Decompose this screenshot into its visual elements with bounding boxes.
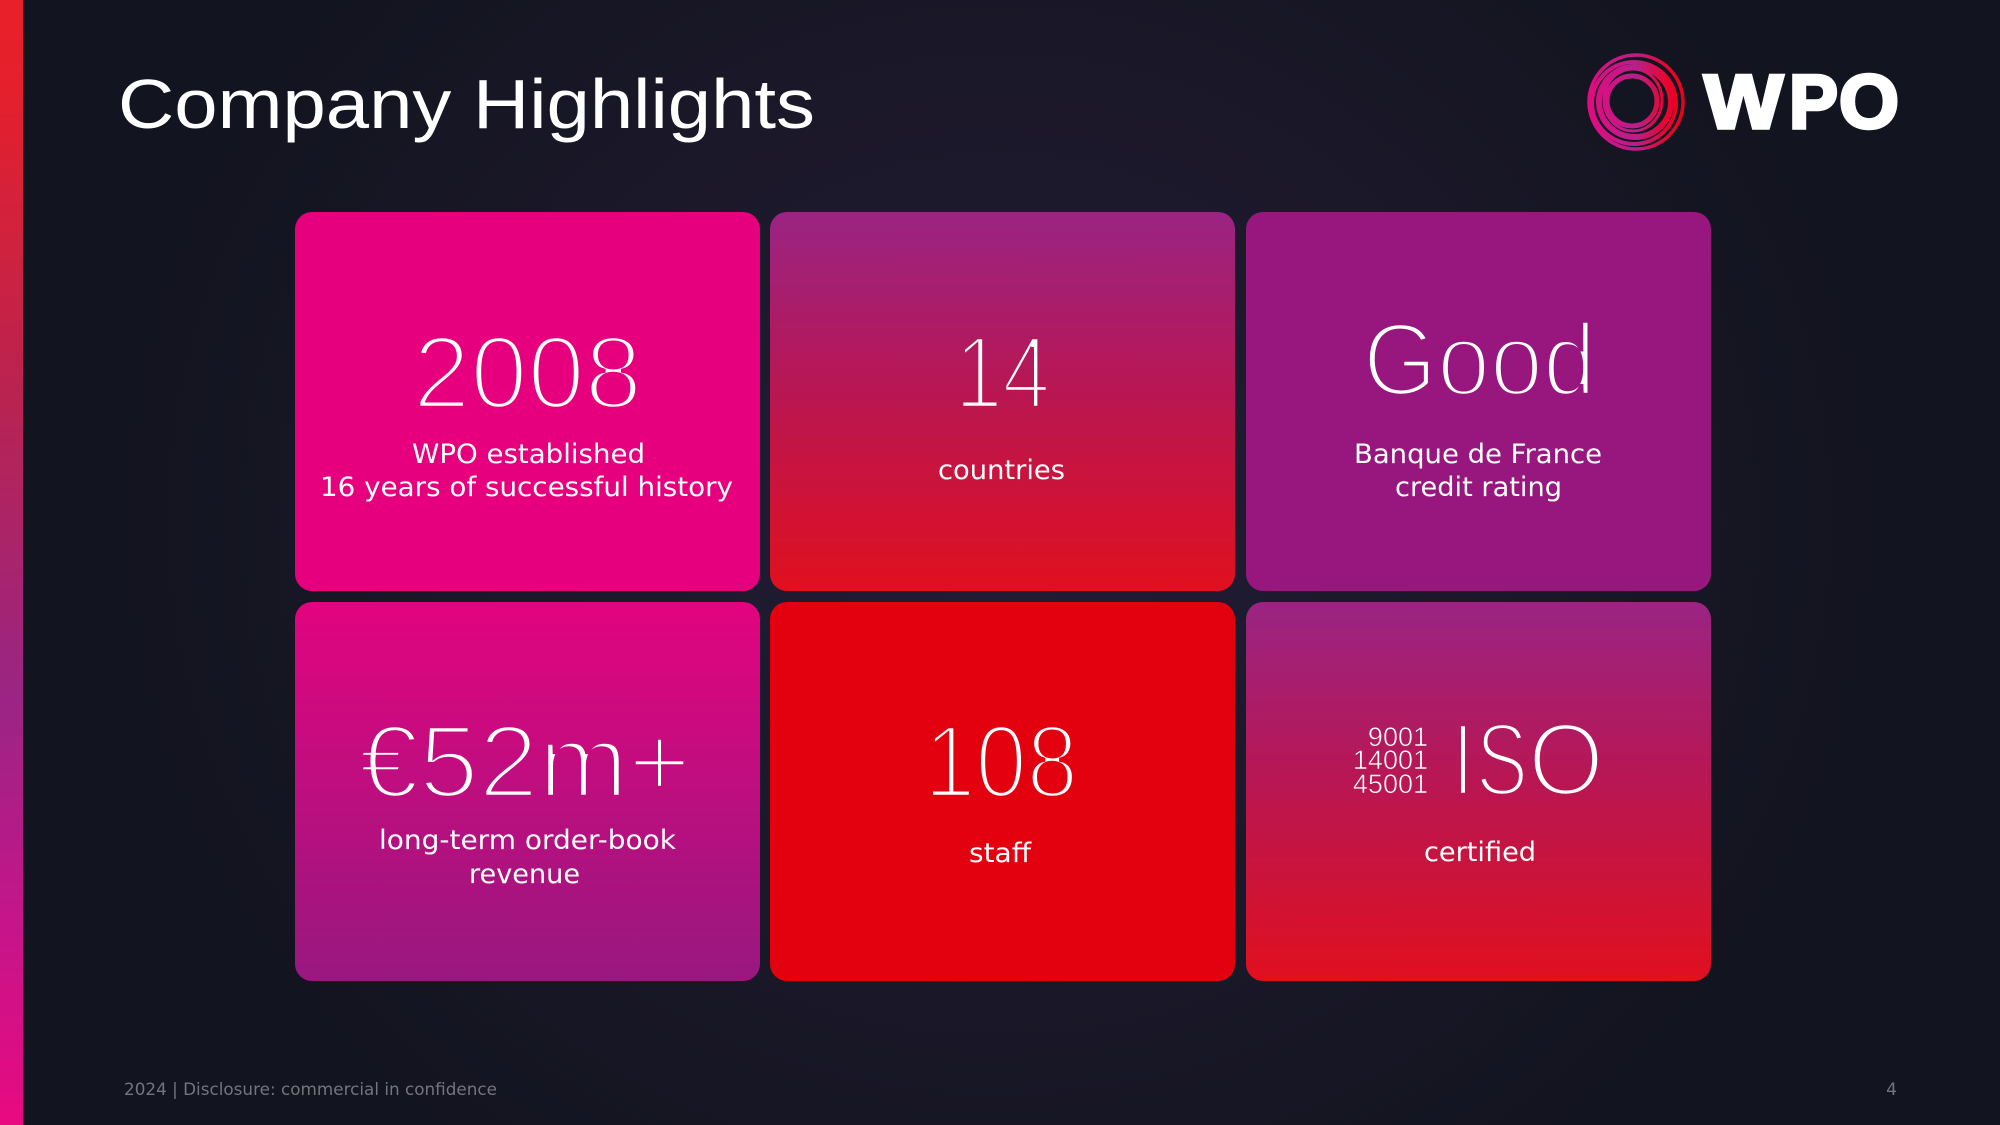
icon: concentric rings [1589,55,1683,149]
stat: 108: 108 [924,704,1078,819]
label: certified: certified [1424,837,1536,868]
title: Company Highlights [118,65,815,143]
stat: ISO [1452,702,1604,817]
stat: 2008: 2008 [413,315,642,430]
ISO standards list: 45001 [1353,769,1428,799]
label: countries: countries [938,455,1065,486]
panel: revenue [295,602,760,981]
stat: ISO: O [1528,702,1604,817]
logo wordmark [1704,60,1899,145]
panel: 2008 [295,212,760,591]
logo wordmark: W [1704,60,1783,145]
stat: 14: 14 [955,315,1050,430]
label: revenue: revenue [469,859,580,890]
left accent bar [0,0,23,1125]
panel: Good credit rating [1246,212,1711,591]
stat: ISO: I [1452,702,1474,817]
label: staff: staff [969,838,1032,869]
panel: 14 countries [770,212,1235,591]
label: credit rating: credit rating [1395,472,1562,503]
stat: Good: Good [1363,302,1596,417]
logo wordmark: P [1789,60,1838,145]
panel: staff [770,602,1235,981]
footer text: 2024 | Disclosure: commercial in confidence [124,1080,497,1100]
label: history: 16 years of successful history [320,472,733,503]
logo: WPO [1589,55,1899,149]
ISO standards list [1353,722,1428,799]
panel: ISO [1246,602,1711,981]
stat: €52m+: €52m+ [359,704,691,819]
logo wordmark: O [1839,60,1899,145]
page number: 4 [1886,1080,1897,1100]
label: long-term order-book: long-term order-book [379,825,676,856]
stat: ISO: S [1476,702,1528,817]
label: WPO established: WPO established [412,439,645,470]
ISO standards list: 9001 [1368,722,1428,752]
ISO standards list: 14001 [1353,745,1428,775]
label: Banque de France: Banque de France [1354,439,1602,470]
